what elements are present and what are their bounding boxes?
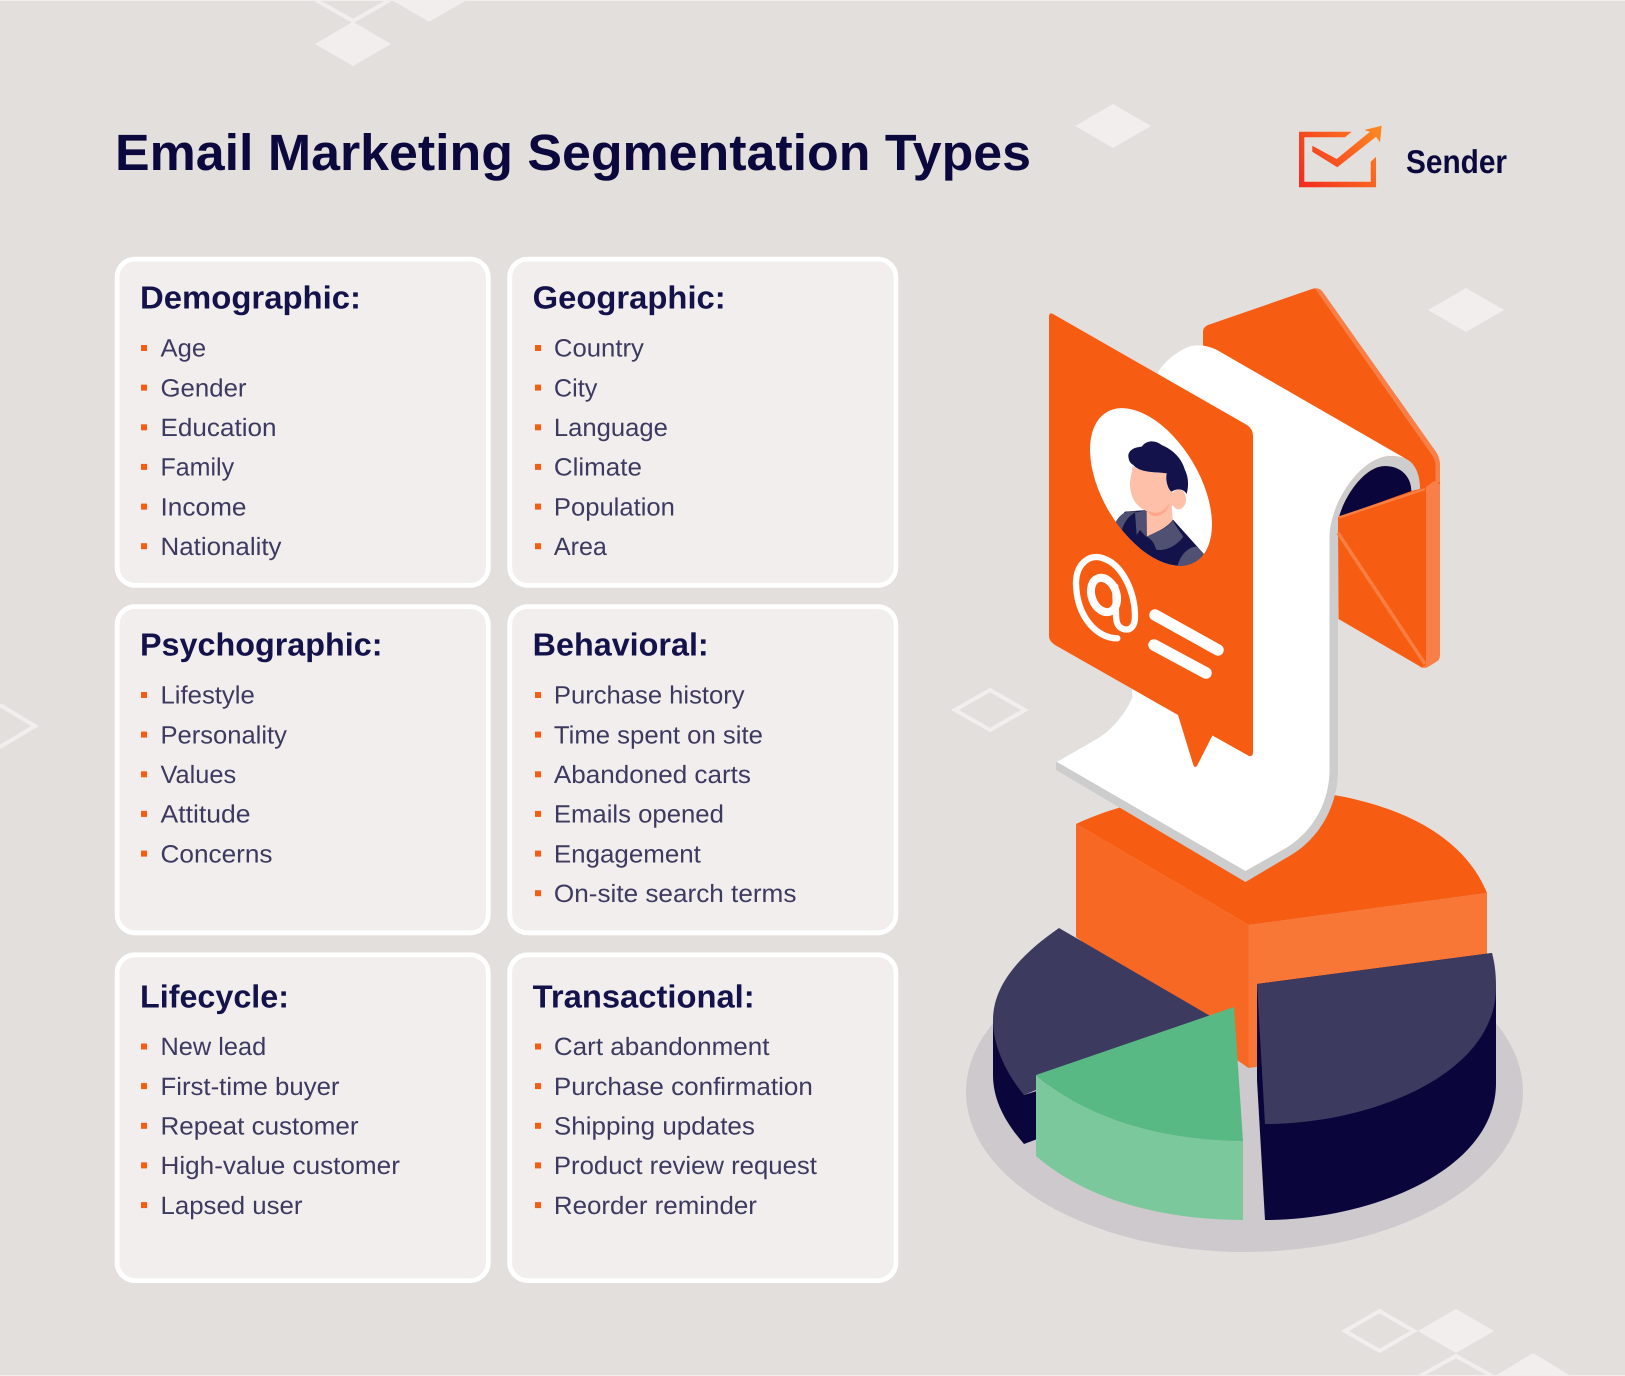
list: Geographic items: Population: [554, 493, 675, 521]
list: Behavioral items: Time spent on site: [554, 721, 763, 749]
navy left slice: [993, 928, 1212, 1144]
panel: Transactional: [510, 955, 896, 1281]
bubble body: [1049, 313, 1253, 767]
wordmark: Sender: [1406, 143, 1507, 180]
illustration: isometric pie chart with email profile: [966, 288, 1523, 1252]
green slice: [1036, 1007, 1243, 1220]
list: Behavioral items: On-site search terms: [554, 880, 796, 908]
heading: Transactional: Transactional:: [533, 978, 755, 1014]
navy right slice: [1257, 953, 1496, 1220]
stand face: [1057, 345, 1408, 871]
list: Geographic items: Area: [554, 533, 607, 561]
stand side: [1056, 510, 1338, 882]
icon: at sign: [1076, 557, 1135, 638]
list: Lifecycle items: Lapsed user: [160, 1192, 302, 1220]
list: Demographic items: Age: [160, 335, 206, 363]
list: Geographic items: City: [554, 374, 598, 402]
list: Lifecycle items: Repeat customer: [160, 1112, 358, 1140]
list: Geographic items: Country: [554, 335, 644, 363]
pie chart: [966, 788, 1523, 1252]
list: Demographic items: Education: [160, 414, 276, 442]
list: Geographic items: [535, 335, 675, 561]
panel: Psychographic: [117, 607, 488, 933]
list: Geographic items: Climate: [554, 454, 642, 482]
list: Psychographic items: Concerns: [160, 840, 272, 868]
list: Lifecycle items: [141, 1033, 400, 1220]
stand interior: [1339, 466, 1411, 517]
list: Lifecycle items: High-value customer: [160, 1152, 400, 1180]
list: Behavioral items: Abandoned carts: [554, 761, 751, 789]
list: Demographic items: Income: [160, 493, 246, 521]
list: Behavioral items: Engagement: [554, 840, 701, 868]
heading: Lifecycle: Lifecycle:: [140, 978, 289, 1014]
list: Lifecycle items: New lead: [160, 1033, 266, 1061]
list: Transactional items: Cart abandonment: [554, 1033, 770, 1061]
title: Email Marketing Segmentation Types: [115, 124, 1031, 181]
envelope back flap: [1203, 288, 1440, 540]
portrait: [1090, 408, 1212, 566]
list: Transactional items: Purchase confirmation: [554, 1073, 813, 1101]
stand rim: [1330, 456, 1420, 540]
envelope front: [1338, 481, 1440, 668]
panel: Geographic: [510, 259, 896, 585]
orange slice: [1076, 788, 1487, 1068]
list: Behavioral items: Purchase history: [554, 682, 745, 710]
list: Lifecycle items: First-time buyer: [160, 1073, 340, 1101]
pie shadow: [966, 932, 1523, 1252]
list: Behavioral items: [535, 682, 796, 908]
logo: Sender: [1299, 126, 1507, 187]
email stand: white @ form: [1056, 345, 1420, 882]
list: Demographic items: Nationality: [160, 533, 282, 561]
text lines: [1154, 615, 1218, 673]
list: Transactional items: Product review request: [554, 1152, 817, 1180]
list: Demographic items: [141, 335, 282, 561]
icon: envelope with arrow: [1299, 126, 1382, 187]
list: Psychographic items: Personality: [160, 721, 287, 749]
list: Transactional items: [535, 1033, 817, 1220]
list: Psychographic items: Values: [160, 761, 236, 789]
panel: Behavioral: [510, 607, 896, 933]
panel: Demographic: [117, 259, 488, 585]
panel: Lifecycle: [117, 955, 488, 1281]
list: Transactional items: Shipping updates: [554, 1112, 755, 1140]
list: Psychographic items: Lifestyle: [160, 682, 255, 710]
heading: Demographic: Demographic:: [140, 280, 361, 316]
list: Geographic items: Language: [554, 414, 668, 442]
list: Psychographic items: Attitude: [160, 801, 250, 829]
heading: Geographic: Geographic:: [533, 280, 726, 316]
list: Transactional items: Reorder reminder: [554, 1192, 757, 1220]
list: Psychographic items: [141, 682, 287, 868]
speech bubble profile card: [1049, 313, 1253, 767]
list: Demographic items: Gender: [160, 374, 246, 402]
list: Behavioral items: Emails opened: [554, 801, 724, 829]
list: Demographic items: Family: [160, 454, 235, 482]
heading: Behavioral: Behavioral:: [533, 627, 709, 663]
heading: Psychographic: Psychographic:: [140, 627, 382, 663]
